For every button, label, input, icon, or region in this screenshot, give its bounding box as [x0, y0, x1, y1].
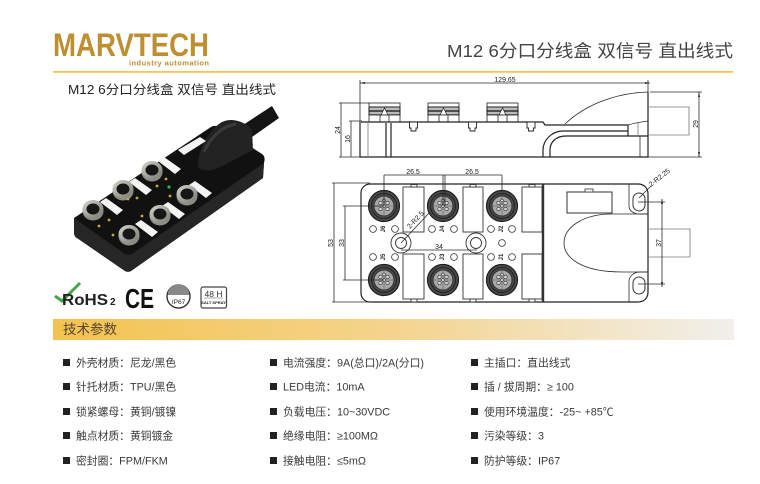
- section bar: [53, 319, 734, 340]
- right housing: label and strain relief: [564, 184, 648, 302]
- icon: IP67 badge: IP67: [172, 299, 186, 306]
- dimensions 26.5: 26.5: [406, 169, 420, 176]
- spec column 1: 密封圈：FPM/FKM: [76, 454, 168, 468]
- spec column 2: [270, 356, 424, 468]
- dimension 34: [401, 244, 477, 251]
- dimension 37: [638, 199, 665, 287]
- spec column 3: 使用环境温度：-25~ +85℃: [484, 404, 614, 418]
- dimension 29: [648, 92, 702, 157]
- port labels: [381, 225, 505, 260]
- mounting holes: [391, 233, 486, 253]
- product photo: distribution box: [74, 106, 279, 272]
- logo: MARVTECH: MARVTECH: [53, 27, 209, 63]
- latch windows: [403, 184, 542, 302]
- icon: 48H salt spray badge: SALT SPRAY: [201, 300, 226, 305]
- dimension 24 and 16: [335, 103, 369, 157]
- dimension 24 and 16: 16: [345, 135, 352, 143]
- dimension 129.65: [360, 77, 650, 157]
- port labels: J5: [381, 253, 387, 260]
- spec column 2: 绝缘电阻：≥100MΩ: [283, 428, 378, 442]
- header rule: [53, 71, 733, 73]
- port labels: J2: [499, 225, 505, 232]
- dimension 129.65: 129.65: [494, 77, 516, 84]
- spec column 3: [471, 356, 614, 468]
- dimension 33: [339, 206, 384, 280]
- port LEDs: [370, 226, 515, 260]
- spec column 1: 锁紧螺母：黄铜/镀镍: [76, 404, 176, 418]
- page title: M12 6分口分线盒 双信号 直出线式: [447, 41, 733, 61]
- top view drawing: [328, 168, 690, 302]
- dimension slot callout: [639, 168, 672, 198]
- side view drawing: [335, 77, 702, 157]
- ports: [368, 190, 400, 222]
- icon: 48H salt spray badge: 48 H: [205, 289, 222, 299]
- dimension hole diameter: [401, 210, 430, 243]
- port labels: J3: [440, 253, 446, 260]
- dimension 53: 53: [328, 239, 335, 247]
- port labels: J1: [499, 253, 505, 260]
- icon: 48H salt spray badge: [201, 287, 226, 308]
- dimension slot callout: 2-R2.25: [648, 168, 672, 189]
- dimension 29: 29: [693, 120, 700, 128]
- dimension 53: [328, 183, 370, 302]
- logo: MARVTECH: industry automation: [129, 58, 209, 68]
- spec column 1: 触点材质：黄铜镀金: [76, 428, 173, 442]
- spec column 3: 防护等级：IP67: [484, 454, 560, 468]
- spec column 1: 针托材质：TPU/黑色: [76, 380, 176, 394]
- section bar: 技术参数: [63, 321, 117, 337]
- spec column 2: LED电流：10mA: [283, 380, 365, 394]
- dimension 24 and 16: 24: [335, 126, 342, 134]
- product heading: M12 6分口分线盒 双信号 直出线式: [68, 82, 277, 97]
- spec column 2: 电流强度：9A(总口)/2A(分口): [283, 356, 424, 370]
- dimensions 26.5: 26.5: [465, 169, 479, 176]
- cable stub: [648, 107, 689, 135]
- spec column 3: 污染等级：3: [484, 428, 544, 442]
- icon: RoHS 2: [55, 283, 116, 309]
- dimension 34: 34: [435, 244, 443, 251]
- dimension hole diameter: 2-R2.5: [406, 210, 426, 230]
- port labels: J4: [440, 225, 446, 232]
- icon: CE mark: CE: [125, 283, 154, 314]
- spec column 2: 负载电压：10~30VDC: [283, 404, 390, 418]
- icon: RoHS 2: RoHS: [62, 292, 108, 309]
- icon: RoHS 2: 2: [110, 297, 116, 308]
- spec column 3: 主插口：直出线式: [484, 356, 571, 370]
- spec column 1: [63, 356, 176, 468]
- dimensions 26.5: [384, 169, 502, 206]
- dimension 37: 37: [656, 239, 663, 247]
- spec column 3: 插 / 拔周期：≥ 100: [484, 380, 574, 394]
- spec column 2: 接触电阻：≤5mΩ: [283, 454, 366, 468]
- icon: IP67 badge: [167, 284, 190, 308]
- cable stub plan: [648, 229, 690, 257]
- spec column 1: 外壳材质：尼龙/黑色: [76, 356, 176, 370]
- port labels: J6: [381, 225, 387, 232]
- dimension 33: 33: [339, 239, 346, 247]
